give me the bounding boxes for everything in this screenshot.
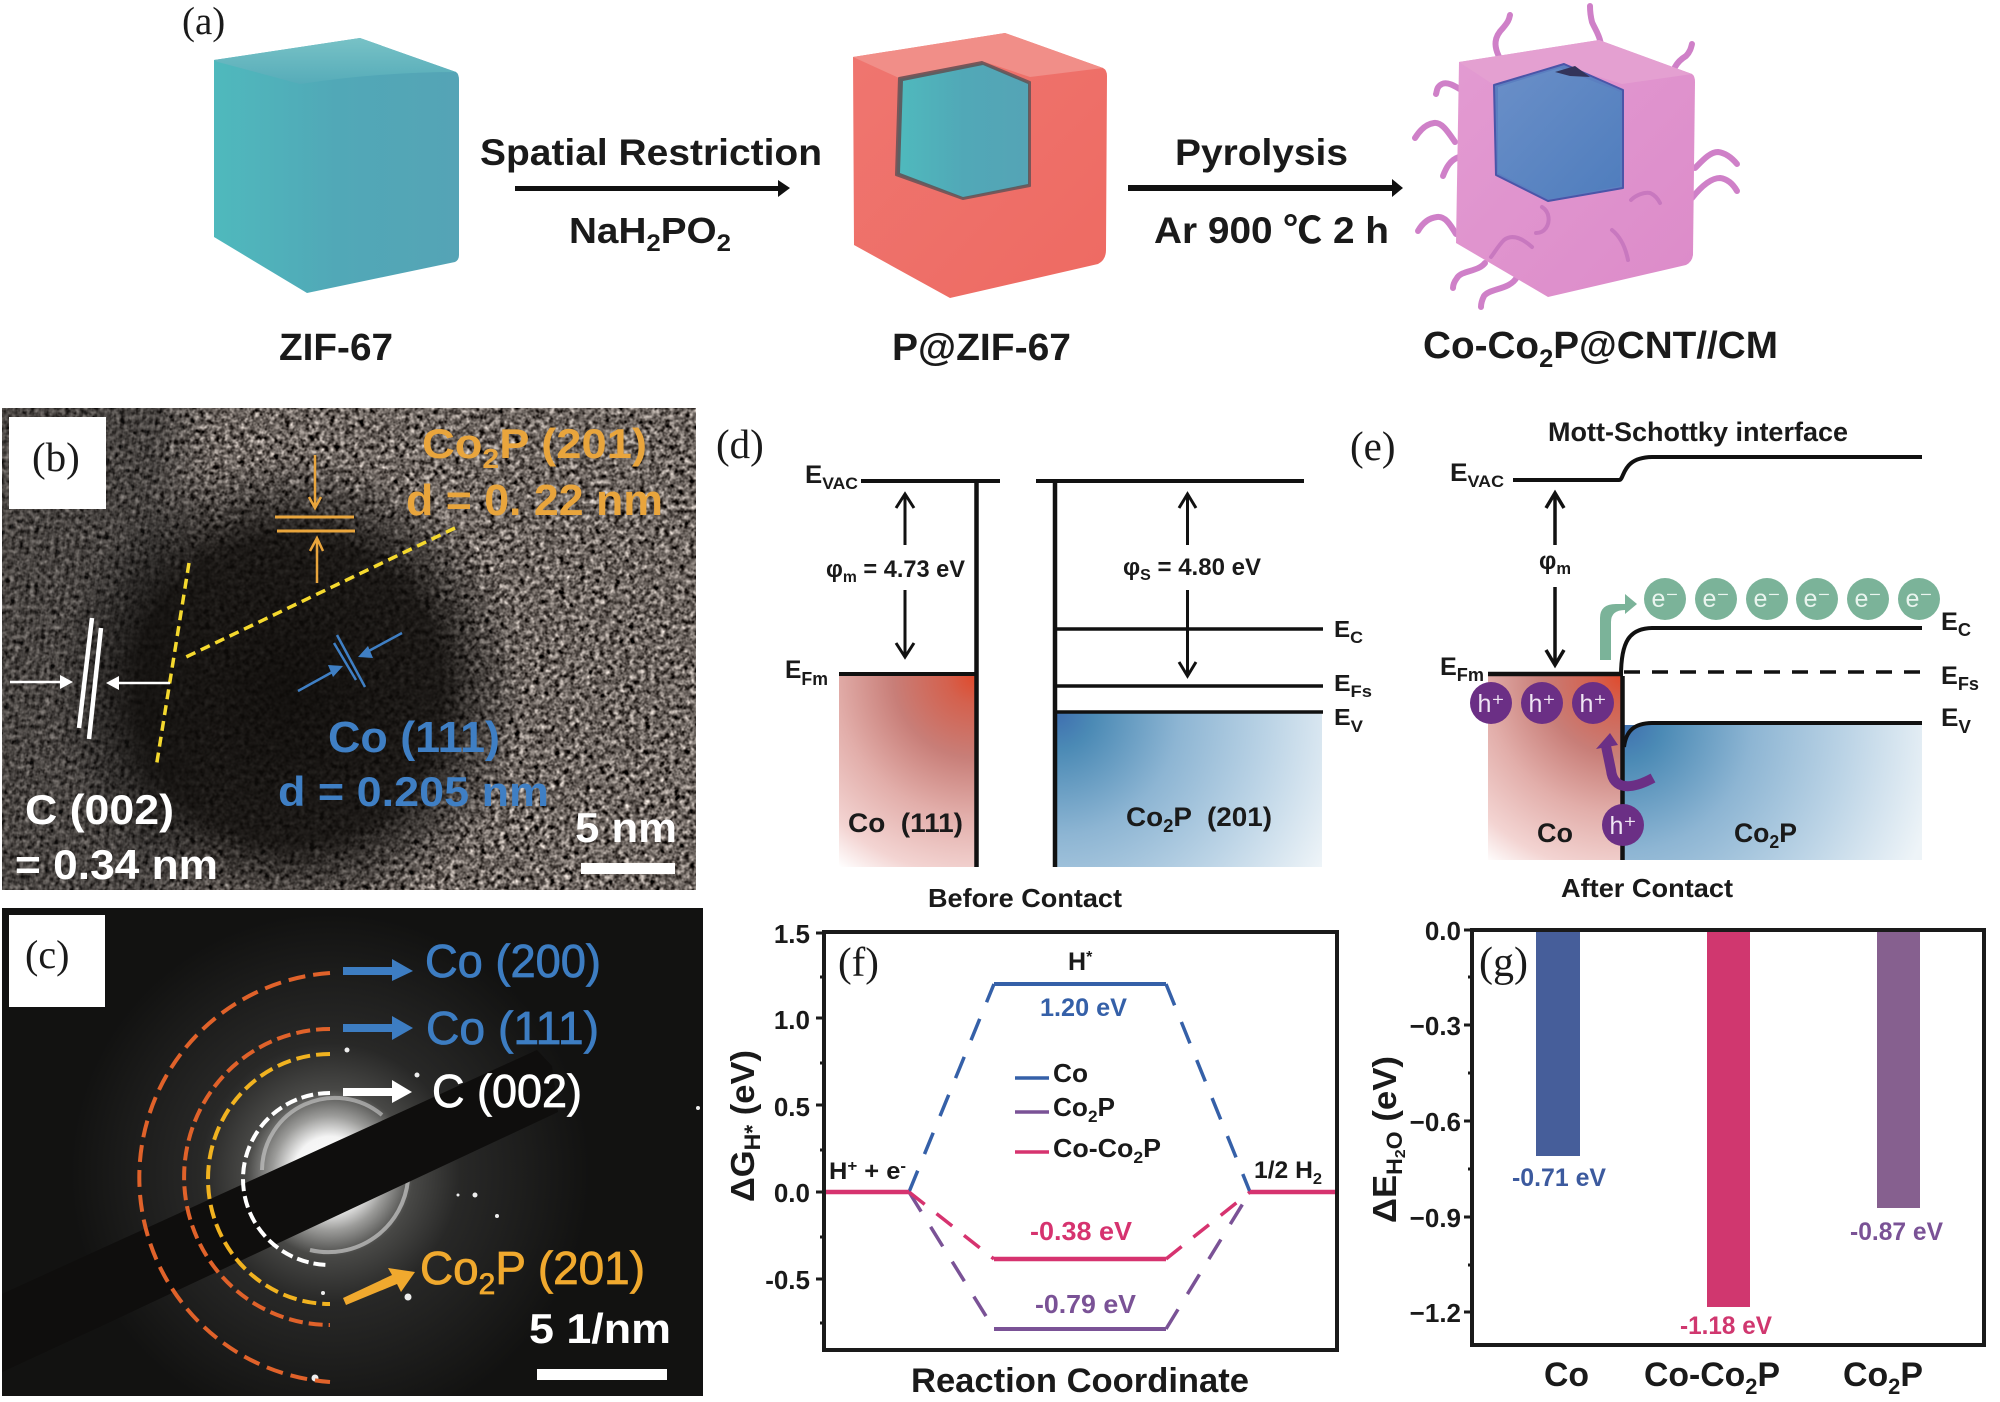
diffraction background [2, 908, 703, 1402]
annotation: C (002) spacing [10, 618, 218, 888]
scale bar: 5 1/nm: 5 1/nm [529, 1305, 671, 1352]
label: H*: H [1068, 948, 1086, 976]
label: P@ZIF-67: P@ZIF-67 [892, 327, 1071, 369]
Co2P semiconductor block [1624, 725, 1922, 860]
label: EV: E [1334, 704, 1349, 730]
label: Co-Co2P@CNT//CM: Co-Co [1423, 325, 1537, 367]
arrow and label: Co (111): Co (111) [426, 1002, 599, 1054]
label: EFm: E [785, 656, 802, 684]
annotation: Co2P (201) spacing: d = 0. 22 nm [406, 476, 663, 525]
label: Co2P (201): 2 [1163, 816, 1173, 836]
y axis title: H* [740, 1124, 765, 1150]
label: NaH2PO2: 2 [646, 230, 661, 257]
y axis title: ΔE [1366, 1177, 1403, 1223]
category: Co-Co2P: P [1757, 1356, 1780, 1394]
label: Co-Co2P@CNT//CM: P@CNT//CM [1553, 325, 1778, 367]
label: phi m: m [843, 569, 857, 586]
label: EVAC: VAC [1468, 472, 1504, 491]
heading: Mott-Schottky interface: Mott-Schottky interface [1548, 417, 1848, 447]
label: Co2P (201): P (201) [1173, 802, 1272, 832]
value: -0.79 eV: -0.79 eV [1035, 1289, 1137, 1319]
legend: Co [1053, 1092, 1088, 1122]
y axis labels [1410, 916, 1461, 1328]
label: phi m: = 4.73 eV [857, 556, 965, 583]
band curves [1488, 457, 1922, 860]
arrow: electron flow [1600, 594, 1637, 660]
label: 1/2 H2: 1/2 H [1254, 1157, 1311, 1184]
label: Co-Co2P@CNT//CM: 2 [1539, 345, 1553, 373]
value: -0.38 eV: -0.38 eV [1030, 1216, 1133, 1246]
label: phi s: = 4.80 eV [1151, 554, 1261, 581]
scale bar: 5 nm [575, 804, 677, 874]
label: EC: E [1941, 608, 1958, 636]
arrow: step 1 [515, 180, 790, 197]
label (g): (g) [1479, 940, 1528, 986]
label: NaH2PO2: 2 [717, 230, 731, 257]
y axis labels: −0.6 [1410, 1107, 1461, 1137]
arrow and label: C (002) [343, 1065, 582, 1117]
value: -0.87 eV: -0.87 eV [1850, 1218, 1943, 1246]
annotation: Co2P (201) spacing [275, 420, 663, 583]
panel: a synthesis scheme [182, 0, 1778, 373]
label box (b): (b) [32, 434, 80, 480]
label: H+ + e-: H [829, 1158, 846, 1185]
category: Co-Co2P: 2 [1745, 1374, 1757, 1399]
label: EVAC: E [1450, 459, 1467, 487]
y axis labels: 0.0 [1425, 916, 1461, 946]
category: Co2P: P [1900, 1356, 1923, 1394]
legend: 2 [1133, 1148, 1143, 1167]
arrow and label: Co2P (201): P (201) [495, 1242, 645, 1294]
y axis labels: −0.3 [1410, 1011, 1461, 1041]
Co metal block [839, 676, 975, 867]
electrons: e⁻ [1702, 585, 1730, 613]
label: phi m: φ [1539, 547, 1557, 575]
label: Co2P: Co [1734, 818, 1770, 848]
annotation: C (002) spacing: = 0.34 nm [15, 841, 218, 888]
beam stop [2, 1050, 558, 1372]
x axis title: Reaction Coordinate [911, 1362, 1249, 1400]
holes [1470, 682, 1644, 846]
value: 1.20 eV: 1.20 eV [1040, 994, 1127, 1022]
label: Co (111): Co (111) [848, 808, 963, 838]
category: Co: Co [1544, 1356, 1589, 1394]
label: EFs: E [1334, 670, 1349, 696]
label: EC: C [1958, 620, 1971, 640]
y axis labels: 1.0 [774, 1005, 810, 1035]
cube: ZIF-67 [214, 38, 459, 293]
annotation: Co2P (201) spacing: Co [422, 420, 478, 467]
electrons: e⁻ [1854, 585, 1882, 613]
label: ZIF-67: ZIF-67 [279, 327, 393, 369]
label: H*: * [1086, 949, 1093, 966]
label: EV: V [1958, 717, 1971, 737]
label box (c): (c) [25, 932, 69, 977]
Co metal block [1488, 676, 1622, 860]
label: Co2P: 2 [1769, 832, 1779, 852]
cube: P@ZIF-67 [853, 33, 1107, 298]
label: NaH2PO2: PO [661, 210, 717, 251]
scale bar: 5 nm: 5 nm [575, 804, 677, 851]
electrons: e⁻ [1753, 585, 1781, 613]
y axis title: H [1382, 1158, 1407, 1175]
y axis title: (eV) [1366, 1056, 1403, 1131]
annotation: Co2P (201) spacing: 2 [482, 443, 499, 474]
arrow and label: Co2P (201): Co [420, 1242, 479, 1294]
holes: h⁺ [1579, 690, 1607, 718]
legend: Co [1053, 1058, 1088, 1088]
legend [1015, 1058, 1161, 1167]
electrons [1644, 578, 1940, 620]
label: After Contact: After Contact [1561, 873, 1733, 903]
label box (c) [9, 915, 105, 1007]
arrow and label: Co (200) [343, 935, 601, 987]
label: EFm: Fm [801, 669, 828, 689]
legend: Co-Co [1053, 1133, 1131, 1163]
y axis labels: 0.0 [774, 1178, 810, 1208]
label: Before Contact: Before Contact [928, 883, 1122, 913]
y axis title: O [1382, 1131, 1407, 1149]
holes: h⁺ [1477, 690, 1505, 718]
label box (b) [9, 417, 106, 509]
label (e): (e) [1350, 423, 1396, 469]
arrow and label: Co2P (201) [343, 1242, 645, 1305]
y axis title: ΔG [724, 1153, 761, 1202]
y axis labels: −0.9 [1410, 1203, 1461, 1233]
label: EC: E [1334, 616, 1349, 642]
label: EVAC: E [805, 461, 822, 489]
label: H+ + e-: + [847, 1158, 857, 1175]
label (d): (d) [716, 421, 764, 467]
label: EFm: Fm [1457, 665, 1484, 685]
label: phi m: φ [826, 556, 843, 583]
label: EFs: Fs [1351, 682, 1372, 701]
label: phi m: m [1556, 559, 1571, 578]
scale bar: 5 1/nm [529, 1305, 671, 1380]
y axis title: (eV) [724, 1050, 761, 1125]
y axis labels: -0.5 [765, 1265, 810, 1295]
label: EV: E [1941, 704, 1958, 732]
value: -1.18 eV: -1.18 eV [1680, 1312, 1772, 1340]
work function arrows [1546, 493, 1564, 665]
annotation: Co (111) spacing: Co (111) [328, 713, 500, 762]
label: H+ + e-: - [900, 1158, 906, 1175]
y axis labels [765, 919, 810, 1295]
label: phi s: S [1140, 567, 1151, 584]
annotation: Co2P (201) spacing: P (201) [499, 420, 647, 467]
y axis labels: 1.5 [774, 919, 810, 949]
panel: d band diagram before contact [716, 421, 1372, 913]
label: phi s: φ [1123, 554, 1140, 581]
annotation: Co (111) spacing: d = 0.205 nm [278, 768, 549, 815]
electrons: e⁻ [1803, 585, 1831, 613]
category: Co2P: Co [1843, 1356, 1888, 1394]
arrow: step 2 [1128, 179, 1403, 197]
label: H+ + e-: + e [857, 1158, 900, 1185]
energy levels [839, 481, 1323, 867]
label: EFs: Fs [1958, 674, 1979, 694]
annotation: Co (111) spacing [278, 633, 549, 815]
arrow and label: Co (200): Co (200) [425, 935, 601, 987]
Co2P semiconductor block [1057, 713, 1322, 867]
legend: 2 [1088, 1107, 1098, 1126]
label: EVAC: VAC [822, 474, 858, 493]
category: Co2P: 2 [1888, 1374, 1900, 1399]
nanotubes on surface [1491, 193, 1660, 260]
cube: Co-Co2P@CNT//CM with nanotubes [1415, 6, 1737, 307]
arrow and label: Co2P (201): 2 [479, 1268, 495, 1301]
TEM micrograph [2, 408, 696, 925]
label: EV: V [1351, 717, 1364, 736]
label: NaH2PO2: NaH [569, 210, 641, 251]
arrow: hole flow [1596, 733, 1653, 786]
label: Co: Co [1537, 818, 1573, 848]
bars [1536, 930, 1920, 1307]
label: Co2P: P [1779, 818, 1797, 848]
holes: h⁺ [1528, 690, 1556, 718]
label: Spatial Restriction: Spatial Restriction [480, 132, 822, 173]
panel: c SAED pattern [2, 908, 703, 1402]
y axis labels: −1.2 [1410, 1298, 1461, 1328]
label (a): (a) [182, 0, 225, 43]
panel: b HRTEM image [2, 408, 696, 925]
holes: h⁺ [1609, 812, 1637, 840]
chart frame with ticks [1464, 930, 1984, 1345]
arrow and label: C (002): C (002) [432, 1065, 582, 1117]
label: EFs: E [1941, 662, 1958, 690]
legend: P [1098, 1092, 1115, 1122]
legend: P [1143, 1133, 1161, 1163]
electrons: e⁻ [1651, 585, 1679, 613]
nanotubes behind [1415, 6, 1737, 307]
series: Co2P [909, 1192, 1250, 1329]
label: Ar 900 C 2 h: Ar 900 ℃ 2 h [1154, 210, 1389, 251]
panel: g water adsorption energy bar chart [1366, 916, 1984, 1399]
category: Co-Co2P: Co-Co [1644, 1356, 1746, 1394]
series: Co-Co2P [826, 1192, 1335, 1259]
y axis labels: 0.5 [774, 1092, 810, 1122]
panel: e band diagram after contact [1350, 417, 1979, 903]
value: -0.71 eV: -0.71 eV [1512, 1164, 1606, 1192]
label: 1/2 H2: 2 [1313, 1171, 1322, 1188]
dashed ring arcs [139, 973, 330, 1382]
label (f): (f) [838, 939, 879, 985]
grain boundary dashes [156, 528, 455, 768]
arrow and label: Co (111) [343, 1002, 599, 1054]
panel: f free energy diagram [724, 919, 1337, 1400]
label: EFm: E [1440, 653, 1457, 681]
series: Co [909, 984, 1250, 1192]
label: Pyrolysis: Pyrolysis [1175, 132, 1348, 173]
label: EC: C [1350, 628, 1363, 647]
label: Co2P (201): Co [1126, 802, 1162, 832]
annotation: C (002) spacing: C (002) [25, 786, 174, 833]
y axis title: 2 [1392, 1149, 1409, 1158]
electrons: e⁻ [1905, 585, 1933, 613]
chart frame with ticks [816, 932, 1337, 1350]
work function arrows [896, 494, 1196, 676]
